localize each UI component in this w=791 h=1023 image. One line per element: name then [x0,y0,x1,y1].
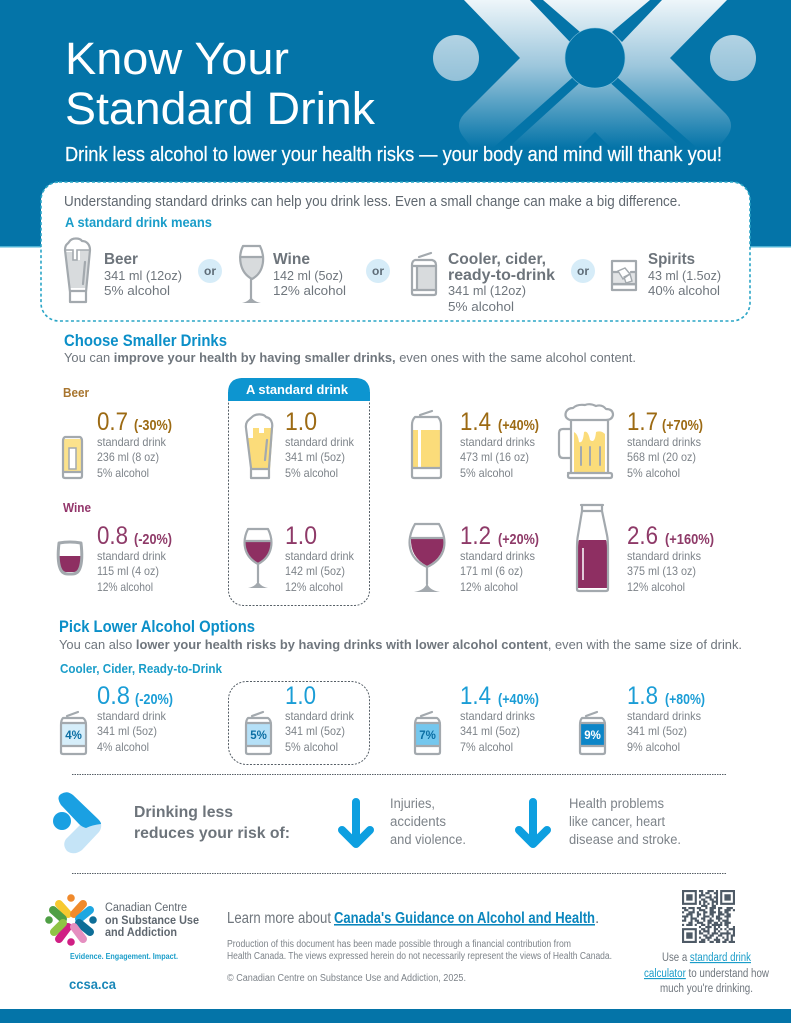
choose smaller drinks intro: You can improve your health by having smaller drinks, even ones with the same alcohol content. [64,351,636,365]
item: cooler 1.4: standard drinks [460,709,535,723]
title: Standard Drink [65,83,376,134]
item: cooler 1.4: (+40%) [498,692,539,708]
item: wine 1.0: 1.0 [285,522,317,550]
calculator note: much you're drinking. [660,983,753,995]
item: wine 0.8: standard drink [97,549,167,563]
item: beer 1.7 [559,404,703,480]
risk text: injuries: and violence. [390,832,466,847]
beer text: 5% alcohol [104,284,170,298]
risk text: health problems: Health problems [569,796,664,811]
icon: can 7%: 7% [419,730,436,742]
cooler text: ready-to-drink [448,267,555,284]
beer text: 341 ml (12oz) [104,269,182,283]
item: wine 1.0 [245,522,355,594]
icon: grey spirits glass [612,261,636,290]
icon: grey beer glass [65,238,90,302]
header graphic: stylized X logo [433,0,756,148]
item: beer 1.4: 5% alcohol [460,466,513,480]
item: cooler 1.4 [415,682,539,754]
calculator note [644,952,770,995]
item: beer 0.7: 5% alcohol [97,466,149,480]
cooler text: 5% alcohol [448,300,514,314]
item: wine 2.6: (+160%) [665,532,714,548]
item: wine 2.6: 375 ml (13 oz) [627,564,696,578]
pick lower alcohol intro: You can also lower your health risks by having drinks with lower alcohol content , even with the same size of drink. [59,638,742,652]
item: beer 1.4: 473 ml (16 oz) [460,450,529,464]
label: wine: Wine [63,501,91,515]
or badge [198,259,222,283]
or badge: or [204,264,216,278]
title: Know Your [65,33,289,84]
item: wine 1.2: (+20%) [498,532,539,548]
definition heading: A standard drink means [65,214,212,230]
item: beer 1.4: (+40%) [498,418,539,434]
icon: beer mug [559,404,613,478]
item: wine 2.6: standard drinks [627,549,701,563]
item: cooler 0.8: 0.8 [97,682,130,710]
item: wine 0.8: 12% alcohol [97,580,153,594]
label: beer: Beer [63,386,89,400]
funding note: © Canadian Centre on Substance Use and Addiction, 2025. [227,973,466,984]
icon: grey wine glass [240,246,263,303]
item: beer 1.7: 568 ml (20 oz) [627,450,696,464]
risk text: injuries [390,796,466,847]
item: beer 1.0: 5% alcohol [285,466,338,480]
item: wine 1.2: 12% alcohol [460,580,518,594]
risk text: health problems: disease and stroke. [569,832,681,847]
wine text [273,251,346,298]
or badge: or [372,264,384,278]
learn more line: . [595,910,599,927]
item: cooler 1.4: 341 ml (5oz) [460,724,520,738]
cooler text: Cooler, cider, [448,251,546,268]
icon: large wine glass [410,524,444,592]
intro sentence: Understanding standard drinks can help you drink less. Even a small change can make a big difference. [64,193,681,210]
footer band [0,1009,791,1023]
risk text: health problems: like cancer, heart [569,814,665,829]
risk heading: Drinking less [134,804,233,821]
icon: tall can [412,411,441,478]
panel header [228,378,370,401]
logo wordmark [105,902,199,939]
item: cooler 1.8: (+80%) [665,692,705,708]
item: beer 1.7: standard drinks [627,435,701,449]
learn more line: Canada's Guidance on Alcohol and Health [334,910,595,927]
calculator note: calculator to understand how [644,968,770,980]
item: cooler 0.8: 4% alcohol [97,740,149,754]
QR code [682,890,735,943]
panel: standard drink definition [41,182,750,321]
header band [0,0,791,248]
item: wine 1.2 [410,522,539,594]
item: cooler 1.8: 1.8 [627,682,658,710]
item: wine 2.6: 12% alcohol [627,580,685,594]
cooler text: 341 ml (12oz) [448,284,526,298]
item: wine 1.2: 171 ml (6 oz) [460,564,523,578]
risk text: health problems [569,796,681,847]
label: cooler, cider, ready-to-drink: Cooler, Cider, Ready-to-Drink [60,662,222,676]
item: beer 1.0: standard drink [285,435,355,449]
heading: pick lower alcohol options: Pick Lower Alcohol Options [59,618,255,636]
icon: can 5%: 5% [250,730,267,742]
item: cooler 1.0: 5% alcohol [285,740,338,754]
item: beer 1.7: 1.7 [627,408,658,436]
logo: CCSA emblem [45,894,97,946]
item: cooler 0.8: (-20%) [135,692,173,708]
item: cooler 1.4: 1.4 [460,682,491,710]
funding note: Production of this document has been made possible through a financial contribution from [227,939,571,950]
logo wordmark: on Substance Use [105,915,199,927]
spirits text: 40% alcohol [648,284,720,298]
item: cooler 0.8 [61,682,173,754]
item: cooler 1.8: 341 ml (5oz) [627,724,687,738]
panel header label: A standard drink [246,382,349,397]
funding note [227,939,612,984]
item: wine 1.0: 142 ml (5oz) [285,564,345,578]
item: beer 0.7: 0.7 [97,408,128,436]
item: cooler 1.8: standard drinks [627,709,701,723]
item: beer 0.7: 236 ml (8 oz) [97,450,159,464]
item: cooler 1.8 [580,682,705,754]
icon: pint glass [246,414,273,478]
item: cooler 1.0: standard drink [285,709,355,723]
item: beer 1.4: 1.4 [460,408,491,436]
icon: stemless wine glass [58,542,82,574]
icon: wine carafe [577,505,608,591]
beer text [104,251,182,298]
risk text: injuries: accidents [390,814,446,829]
spirits text [648,251,721,298]
icon: wine glass [245,529,271,588]
icon: down arrow [519,802,547,844]
wine text: Wine [273,251,310,268]
item: beer 1.7: (+70%) [662,418,703,434]
item: cooler 1.8: 9% alcohol [627,740,680,754]
item: cooler 1.0: 341 ml (5oz) [285,724,345,738]
heading: choose smaller drinks: Choose Smaller Drinks [64,332,227,350]
panel: a standard drink highlight [228,378,370,606]
item: beer 1.0 [246,408,355,480]
spirits text: 43 ml (1.5oz) [648,269,721,283]
item: beer 0.7: (-30%) [134,418,172,434]
item: beer 1.0: 341 ml (5oz) [285,450,345,464]
logo wordmark: Canadian Centre [105,902,187,914]
wine text: 12% alcohol [273,284,346,298]
item: wine 1.0: standard drink [285,549,355,563]
learn more line [227,910,599,927]
spirits text: Spirits [648,251,695,268]
beer text: Beer [104,251,138,268]
risk heading: reduces your risk of: [134,825,290,842]
learn more line: Learn more about [227,910,332,927]
item: cooler 1.0 [246,682,355,754]
item: wine 2.6 [577,505,714,594]
item: beer 1.4: standard drinks [460,435,535,449]
highlight box: standard strength [228,682,370,764]
item: wine 1.2: standard drinks [460,549,535,563]
item: wine 0.8: 115 ml (4 oz) [97,564,159,578]
logo wordmark: and Addiction [105,927,177,939]
item: beer 0.7 [63,408,172,480]
item: beer 1.0: 1.0 [285,408,317,436]
icon: grey can [412,253,436,295]
icon: can 9%: 9% [584,730,601,742]
funding note: Health Canada. The views expressed herein do not necessarily represent the views of Health Canada. [227,951,612,962]
item: cooler 1.0: 1.0 [285,682,316,710]
icon: small can [63,437,82,478]
subtitle: Drink less alcohol to lower your health risks — your body and mind will thank you! [65,143,722,166]
risk text: injuries: Injuries, [390,796,435,811]
or badge [366,259,390,283]
item: wine 1.0: 12% alcohol [285,580,343,594]
item: cooler 0.8: standard drink [97,709,167,723]
item: cooler 0.8: 341 ml (5oz) [97,724,157,738]
or badge: or [577,264,589,278]
cooler text [448,251,555,314]
item: wine 0.8: 0.8 [97,522,128,550]
item: cooler 1.4: 7% alcohol [460,740,513,754]
title [65,33,376,134]
item: beer 1.7: 5% alcohol [627,466,680,480]
item: wine 0.8 [58,522,172,594]
icon: can 4%: 4% [65,730,82,742]
item: beer 0.7: standard drink [97,435,167,449]
risk heading [134,804,290,842]
wine text: 142 ml (5oz) [273,269,343,283]
item: wine 2.6: 2.6 [627,522,658,550]
calculator note: Use a standard drink [662,952,751,964]
icon: chevron mark [53,792,101,853]
website: ccsa.ca [69,977,116,992]
icon: down arrow [342,802,370,844]
or badge [571,259,595,283]
item: beer 1.4 [412,408,539,480]
item: wine 1.2: 1.2 [460,522,491,550]
item: wine 0.8: (-20%) [134,532,172,548]
logo tagline: Evidence. Engagement. Impact. [70,951,178,961]
